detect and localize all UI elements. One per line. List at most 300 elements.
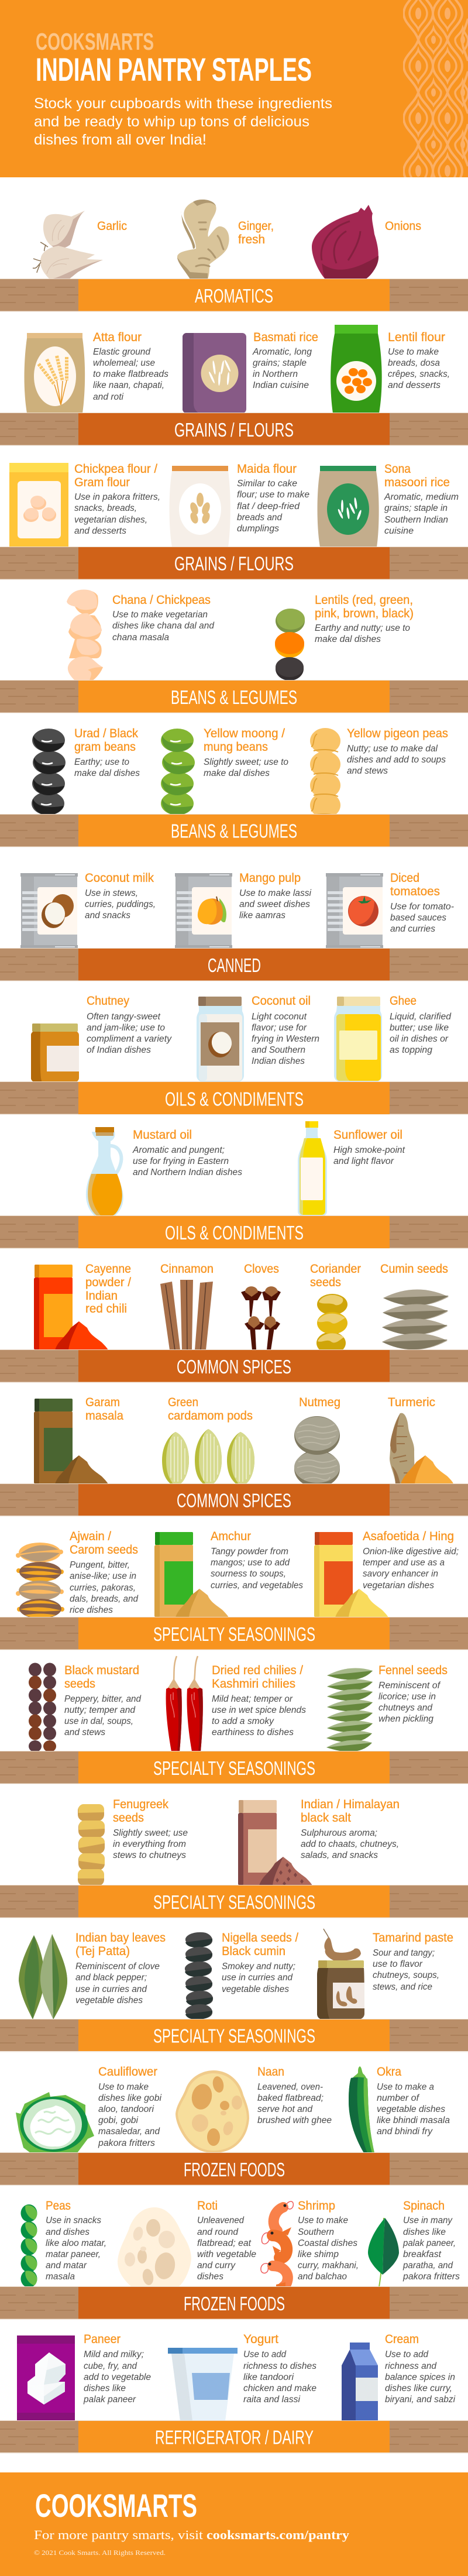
text: mango pulp: Mango pulp <box>239 871 301 885</box>
icon: turmeric <box>390 1413 453 1484</box>
text: lentil flour: Use to make <box>388 347 439 357</box>
text: fenugreek <box>113 1798 188 1860</box>
shelf: specialty 4: SPECIALTY SEASONINGS <box>153 2025 315 2047</box>
icon: garam masala jar <box>34 1399 108 1484</box>
shelf: refrigerator / dairy <box>0 2420 468 2453</box>
text: ghee: as topping <box>390 1045 432 1055</box>
text: fennel seeds: chutneys and <box>378 1703 433 1713</box>
text: yogurt: Yogurt <box>243 2333 278 2346</box>
text: lentils: make dal dishes <box>315 634 381 644</box>
text: maida flour: dumplings <box>237 524 279 534</box>
text: okra: and bhindi fry <box>377 2127 433 2137</box>
icon: chickpeas <box>67 589 103 681</box>
text: coconut milk: Use in stews, <box>85 888 138 898</box>
text: amchur: curries, and vegetables <box>211 1581 303 1591</box>
shelf: oils 1 <box>0 1081 468 1114</box>
text: shrimp: Shrimp <box>298 2199 335 2213</box>
text: peas: masala <box>46 2272 75 2282</box>
text: pigeon peas <box>347 727 448 776</box>
text: fenugreek: in everything from <box>113 1839 186 1849</box>
text: amchur: Tangy powder from <box>211 1547 288 1557</box>
text: chana: dishes like chana dal and <box>112 621 215 631</box>
text: pigeon peas: and stews <box>347 766 388 776</box>
text: okra <box>377 2065 450 2137</box>
text: atta flour: wholemeal; use <box>93 358 155 368</box>
section: specialty 1 items <box>16 1530 459 1619</box>
text: ghee: butter; use like <box>390 1023 449 1033</box>
text: coconut milk: Coconut milk <box>85 871 154 885</box>
text: basmati rice: grains; staple <box>253 358 307 368</box>
section: aromatics items <box>33 200 421 279</box>
icon: basmati rice box <box>183 333 246 413</box>
text: pigeon peas: Yellow pigeon peas <box>347 727 448 740</box>
icon: lentils <box>275 609 305 681</box>
text: dried chilies <box>212 1664 306 1737</box>
text: black mustard: seeds <box>64 1677 95 1691</box>
text: urad <box>74 727 140 778</box>
section: beans 1 items <box>67 589 414 681</box>
icon: black salt jar <box>238 1800 312 1885</box>
text: cream: biryani, and sabzi <box>385 2395 456 2405</box>
text: spinach: Use in many <box>403 2216 453 2225</box>
text: atta flour: Elastic ground <box>93 347 151 357</box>
text: coconut milk: curries, puddings, <box>85 899 156 909</box>
text: paneer <box>83 2333 151 2405</box>
text: black mustard: and stews <box>64 1727 105 1737</box>
text: ajwain: dals, breads, and <box>70 1594 139 1604</box>
text: roti: and curry <box>197 2261 236 2271</box>
icon: black mustard seeds <box>29 1663 56 1752</box>
text: shrimp: Coastal dishes <box>298 2238 357 2248</box>
text: bay leaves <box>75 1931 166 2005</box>
text: cream: richness and <box>385 2361 437 2371</box>
shelf: frozen 1: FROZEN FOODS <box>184 2159 285 2180</box>
text: asafoetida: Asafoetida / Hing <box>363 1530 454 1543</box>
text: dried chilies: earthiness to dishes <box>212 1727 294 1737</box>
text: chickpea flour: vegetarian dishes, <box>74 515 147 525</box>
text: ajwain: curries, pakoras, <box>70 1583 136 1593</box>
text: bay leaves: (Tej Patta) <box>75 1945 130 1958</box>
text: lentil flour: breads, dosa <box>388 358 440 368</box>
icon: amchur jar <box>154 1532 229 1617</box>
text: fennel seeds: Reminiscent of <box>378 1681 441 1691</box>
text: diced tomatoes <box>390 871 454 934</box>
subtitle: and be ready to whip up tons of delicious <box>34 114 309 130</box>
text: maida flour: breads and <box>237 513 283 523</box>
text: sona masoori rice: Southern Indian <box>384 515 448 525</box>
icon: coriander seeds <box>316 1294 347 1354</box>
text: diced tomatoes: and curries <box>390 924 435 934</box>
text: basmati rice: Aromatic, long <box>252 347 312 357</box>
text: lentil flour: crêpes, snacks, <box>388 369 450 379</box>
icon: fenugreek seeds <box>78 1804 105 1886</box>
text: sona masoori rice: Aromatic, medium <box>384 492 459 502</box>
text: fennel seeds: Fennel seeds <box>378 1664 448 1677</box>
text: cream: Cream <box>385 2333 419 2346</box>
text: dried chilies: use in wet spice blends <box>212 1705 306 1715</box>
text: paneer: Mild and milky; <box>84 2350 144 2359</box>
footer link line <box>34 2527 350 2542</box>
text: spinach <box>402 2199 460 2282</box>
text: yogurt: richness to dishes <box>243 2361 316 2371</box>
shelf: specialty 4 <box>0 2019 468 2052</box>
text: nigella: Black cumin <box>222 1945 285 1958</box>
text: green cardamom: Green <box>168 1396 198 1409</box>
text: spinach: pakora fritters <box>402 2272 460 2282</box>
text: coconut oil <box>252 994 319 1066</box>
icon: roti <box>118 2207 191 2287</box>
footer link line: cooksmarts.com/pantry <box>207 2527 350 2542</box>
icon: chutney jar <box>31 1023 79 1082</box>
text: coconut milk <box>85 871 156 921</box>
label: ginger: Ginger, <box>238 219 274 233</box>
icon: diced tomatoes can <box>326 873 383 949</box>
subtitle: dishes from all over India! <box>34 132 207 148</box>
text: chana <box>112 593 215 643</box>
shelf: common spices 2: COMMON SPICES <box>177 1490 291 1511</box>
text: spinach: breakfast <box>403 2249 442 2259</box>
text: mung: Yellow moong / <box>204 727 285 740</box>
shelf: beans 2 <box>0 815 468 847</box>
text: maida flour: flat / deep-fried <box>237 502 300 511</box>
text: turmeric: Turmeric <box>388 1396 435 1409</box>
icon: coconut milk can <box>20 873 78 949</box>
icon: dried red chilies <box>166 1656 203 1751</box>
text: ajwain: rice dishes <box>70 1605 113 1615</box>
text: chana: Use to make vegetarian <box>112 610 208 620</box>
text: diced tomatoes: Use for tomato- <box>390 902 454 912</box>
text: black salt: black salt <box>301 1811 351 1825</box>
text: bay leaves: and black pepper; <box>75 1973 147 1983</box>
text: tamarind: Sour and tangy; <box>373 1948 435 1958</box>
subtitle: Stock your cupboards with these ingredients <box>34 95 332 112</box>
text: roti: flatbread; eat <box>197 2238 252 2248</box>
text: asafoetida: vegetarian dishes <box>363 1581 434 1591</box>
text: shrimp: Use to make <box>298 2216 348 2225</box>
text: green cardamom: cardamom pods <box>168 1409 253 1423</box>
text: nigella: Nigella seeds / <box>222 1931 298 1945</box>
text: mung: make dal dishes <box>204 768 270 778</box>
icon: sunflower oil bottle <box>298 1121 327 1216</box>
icon: tamarind jar <box>317 1929 364 2019</box>
text: atta flour <box>93 331 168 402</box>
text: peas: Peas <box>46 2199 71 2213</box>
label: ginger: fresh <box>238 233 265 246</box>
text: basmati rice <box>252 331 318 390</box>
text: bay leaves: Indian bay leaves <box>75 1931 166 1945</box>
icon: atta flour sack <box>25 333 85 413</box>
text: black mustard: use in dal, soups, <box>64 1716 133 1726</box>
text: chutney: Often tangy-sweet <box>87 1012 161 1022</box>
section: specialty 2 items <box>29 1656 448 1752</box>
section: grains 1 items <box>25 325 450 413</box>
text: urad: Urad / Black <box>74 727 138 740</box>
text: lentils: pink, brown, black) <box>315 607 414 620</box>
text: tamarind: chutneys, soups, <box>373 1970 439 1980</box>
text: atta flour: like naan, chapati, <box>93 380 164 390</box>
text: chickpea flour: and desserts <box>74 526 126 536</box>
text: atta flour: and roti <box>93 392 124 402</box>
text: naan: baked flatbread; <box>257 2093 324 2103</box>
icon: chickpea flour box <box>9 463 68 547</box>
label: garlic: Garlic <box>97 219 127 233</box>
section: common spices 2 items <box>34 1396 453 1488</box>
text: lentils <box>315 593 414 644</box>
text: dried chilies: to add a smoky <box>212 1716 274 1726</box>
text: okra: like bhindi masala <box>377 2115 450 2125</box>
footer logo: COOKSMARTS <box>35 2487 197 2524</box>
text: cauliflower: gobi, gobi <box>98 2115 139 2125</box>
icon: asafoetida jar <box>314 1532 388 1617</box>
text: yogurt: Use to add <box>243 2350 287 2359</box>
text: nigella: vegetable dishes <box>222 1984 289 1994</box>
text: black salt: add to chaats, chutneys, <box>301 1839 399 1849</box>
section: specialty 3 items <box>78 1798 400 1886</box>
shelf: canned <box>0 948 468 981</box>
text: atta flour: to make flatbreads <box>93 369 168 379</box>
text: ghee <box>390 994 452 1055</box>
text: lentils: Lentils (red, green, <box>315 593 413 607</box>
text: coconut oil: and Southern <box>252 1045 305 1055</box>
text: mustard oil: use for frying in Eastern <box>133 1156 229 1166</box>
label: ginger <box>238 219 274 246</box>
text: ghee: oil in dishes or <box>390 1034 449 1044</box>
icon: okra <box>349 2066 374 2153</box>
shelf: refrigerator / dairy: REFRIGERATOR / DAIRY <box>155 2426 314 2448</box>
shelf: specialty 2 <box>0 1751 468 1784</box>
text: nigella: use in curries and <box>222 1973 293 1983</box>
text: naan: Leavened, oven- <box>257 2082 323 2092</box>
text: urad: gram beans <box>74 740 136 754</box>
shelf: common spices 2 <box>0 1484 468 1516</box>
text: paneer: palak paneer <box>83 2395 136 2405</box>
text: cinnamon: Cinnamon <box>160 1262 214 1276</box>
text: diced tomatoes: based sauces <box>390 913 446 923</box>
text: coconut milk: and snacks <box>85 911 130 921</box>
text: green cardamom <box>168 1396 253 1423</box>
text: spinach: Spinach <box>403 2199 445 2213</box>
text: chutney: and jam-like; use to <box>87 1023 165 1033</box>
shelf: frozen 1 <box>0 2152 468 2185</box>
text: fenugreek: stews to chutneys <box>113 1850 186 1860</box>
shelf: common spices 1: COMMON SPICES <box>177 1356 291 1378</box>
text: sunflower oil: and light flavor <box>333 1156 394 1166</box>
section: oils 2 items <box>86 1121 405 1216</box>
text: mango pulp <box>239 871 312 921</box>
text: pigeon peas: dishes and add to soups <box>347 755 446 765</box>
text: chutney: of Indian dishes <box>87 1045 151 1055</box>
text: black mustard: Black mustard <box>64 1664 139 1677</box>
text: peas <box>46 2199 106 2282</box>
text: garam masala: masala <box>85 1409 123 1423</box>
shelf: common spices 1 <box>0 1349 468 1382</box>
text: chana: Chana / Chickpeas <box>112 593 211 607</box>
section: frozen 2 items <box>21 2199 460 2288</box>
shelf: frozen 2 <box>0 2287 468 2319</box>
text: cauliflower: Use to make <box>98 2082 149 2092</box>
text: garam masala: Garam <box>85 1396 120 1409</box>
text: black salt: salads, and snacks <box>301 1850 378 1860</box>
text: fennel seeds: licorice; use in <box>378 1692 436 1702</box>
text: cayenne: powder / <box>85 1276 131 1289</box>
icon: fennel seeds <box>326 1668 373 1751</box>
text: sona masoori rice: cuisine <box>384 526 414 536</box>
text: bay leaves: vegetable dishes <box>75 1995 143 2005</box>
text: tamarind <box>373 1931 453 1992</box>
text: yogurt: raita and lassi <box>243 2395 301 2405</box>
text: mustard oil <box>132 1128 242 1177</box>
shelf: canned: CANNED <box>208 954 261 976</box>
text: peas: matar paneer, <box>46 2249 101 2259</box>
text: maida flour <box>237 462 309 534</box>
footer link line: For more pantry smarts, visit <box>34 2527 204 2542</box>
text: sona masoori rice: masoori rice <box>384 476 450 489</box>
icon: spinach <box>368 2218 399 2287</box>
text: shrimp: like shimp <box>298 2249 339 2259</box>
text: ajwain <box>70 1530 139 1615</box>
text: basmati rice: Basmati rice <box>253 331 318 344</box>
text: peas: Use in snacks <box>46 2216 101 2225</box>
text: cumin seeds: Cumin seeds <box>380 1262 448 1276</box>
text: roti: and round <box>197 2227 239 2237</box>
shelf: beans 1 <box>0 680 468 713</box>
text: bay leaves: Reminiscent of clove <box>75 1962 160 1972</box>
text: cauliflower <box>98 2065 162 2148</box>
text: urad: Earthy; use to <box>74 757 129 767</box>
text: mango pulp: Use to make lassi <box>239 888 312 898</box>
text: asafoetida: savory enhancer in <box>363 1569 438 1579</box>
shelf: specialty 2: SPECIALTY SEASONINGS <box>153 1757 315 1779</box>
text: spinach: paratha, and <box>402 2261 453 2271</box>
text: coriander seeds <box>310 1262 361 1289</box>
text: yogurt <box>243 2333 316 2405</box>
text: chutney: compliment a variety <box>87 1034 172 1044</box>
text: nigella: Smokey and nutty; <box>222 1962 295 1972</box>
text: coconut oil: frying in Western <box>252 1034 319 1044</box>
text: cauliflower: Cauliflower <box>98 2065 157 2079</box>
shelf: beans 2: BEANS & LEGUMES <box>171 820 297 842</box>
icon: yogurt cup <box>168 2348 238 2421</box>
copyright: © 2021 Cook Smarts. All Rights Reserved. <box>34 2548 166 2557</box>
header panel <box>0 0 468 177</box>
icon: mustard oil bottle <box>86 1127 123 1216</box>
shelf: oils 2 <box>0 1216 468 1248</box>
text: nigella <box>222 1931 298 1994</box>
text: cauliflower: pakora fritters <box>98 2138 155 2148</box>
text: spinach: dishes like <box>403 2227 446 2237</box>
icon: sona masoori rice sack <box>317 466 379 547</box>
section: beans 2 items <box>32 727 448 818</box>
text: chutney <box>87 994 172 1055</box>
text: cayenne: red chili <box>85 1302 127 1316</box>
text: mung: mung beans <box>204 740 268 754</box>
section: canned items <box>20 871 454 949</box>
text: maida flour: flour; use to make <box>237 490 309 500</box>
text: basmati rice: in Northern <box>253 369 298 379</box>
icon: shrimp <box>261 2201 293 2287</box>
text: chickpea flour <box>74 462 160 536</box>
text: sona masoori rice <box>384 462 459 536</box>
text: roti: dishes <box>197 2272 223 2282</box>
text: roti: Roti <box>197 2199 218 2213</box>
text: ajwain: Carom seeds <box>70 1543 138 1557</box>
text: mustard oil: Mustard oil <box>133 1128 192 1142</box>
text: chickpea flour: snacks, breads, <box>74 503 137 513</box>
text: amchur: mangos; use to add <box>211 1558 290 1568</box>
text: okra: Okra <box>377 2065 401 2079</box>
text: coriander seeds: seeds <box>310 1276 341 1289</box>
text: peas: and matar <box>46 2261 87 2271</box>
text: coconut oil: Coconut oil <box>252 994 311 1008</box>
text: diced tomatoes: Diced <box>390 871 419 885</box>
text: okra: number of <box>377 2093 420 2103</box>
label: onions: Onions <box>385 219 421 233</box>
shelf: oils 2: OILS & CONDIMENTS <box>165 1222 304 1244</box>
text: peas: like aloo matar, <box>46 2238 106 2248</box>
text: shrimp: Southern <box>298 2227 334 2237</box>
text: dried chilies: Kashmiri chilies <box>212 1677 295 1691</box>
icon: nigella seeds <box>185 1932 213 2019</box>
icon: cumin seeds <box>382 1289 449 1350</box>
shelf: specialty 3 <box>0 1885 468 1918</box>
text: basmati rice: Indian cuisine <box>253 380 309 390</box>
text: asafoetida: temper and use as a <box>363 1558 445 1568</box>
icon: cauliflower <box>16 2092 94 2153</box>
text: coriander seeds: Coriander <box>310 1262 361 1276</box>
text: black salt <box>301 1798 400 1860</box>
icon: cream carton <box>342 2343 378 2421</box>
text: paneer: cube, fry, and <box>84 2361 137 2371</box>
text: roti: with vegetable <box>197 2249 256 2259</box>
text: sunflower oil: High smoke-point <box>333 1145 405 1155</box>
icon: paneer pack <box>17 2335 75 2421</box>
text: mustard oil: and Northern Indian dishes <box>133 1167 242 1177</box>
icon: onion <box>312 205 378 279</box>
text: amchur: Amchur <box>211 1530 251 1543</box>
text: naan: serve hot and <box>257 2104 313 2114</box>
text: paneer: add to vegetable <box>84 2372 151 2382</box>
text: fennel seeds <box>378 1664 448 1724</box>
text: black salt: Indian / Himalayan <box>301 1798 400 1811</box>
section: refrigerator items <box>17 2333 456 2421</box>
text: okra: Use to make a <box>377 2082 434 2092</box>
text: paneer: Paneer <box>84 2333 121 2346</box>
text: yogurt: chicken and make <box>243 2383 316 2393</box>
text: cream: Use to add <box>385 2350 429 2359</box>
text: amchur <box>211 1530 303 1591</box>
text: coconut oil: flavor; use for <box>252 1023 307 1033</box>
text: cayenne: Indian <box>85 1289 118 1303</box>
section: common spices 1 items <box>34 1262 449 1354</box>
text: tamarind: stews, and rice <box>373 1982 432 1992</box>
icon: cinnamon sticks <box>160 1280 213 1350</box>
text: cayenne <box>85 1262 131 1316</box>
text: ghee: Liquid, clarified <box>390 1012 452 1022</box>
shelf: grains 2 <box>0 547 468 579</box>
text: chickpea flour: Chickpea flour / <box>74 462 157 476</box>
text: ajwain: Ajwain / <box>70 1530 111 1543</box>
text: yogurt: like tandoori <box>243 2372 294 2382</box>
shelf: grains 1 <box>0 413 468 445</box>
shelf: aromatics: AROMATICS <box>195 285 273 307</box>
text: coconut oil: Indian dishes <box>252 1056 305 1066</box>
text: lentil flour <box>388 331 450 390</box>
text: roti: Unleavened <box>197 2216 245 2225</box>
icon: mango pulp can <box>175 873 232 949</box>
icon: cloves <box>241 1286 281 1350</box>
icon: ghee jar <box>334 997 382 1082</box>
text: fennel seeds: when pickling <box>378 1714 433 1724</box>
